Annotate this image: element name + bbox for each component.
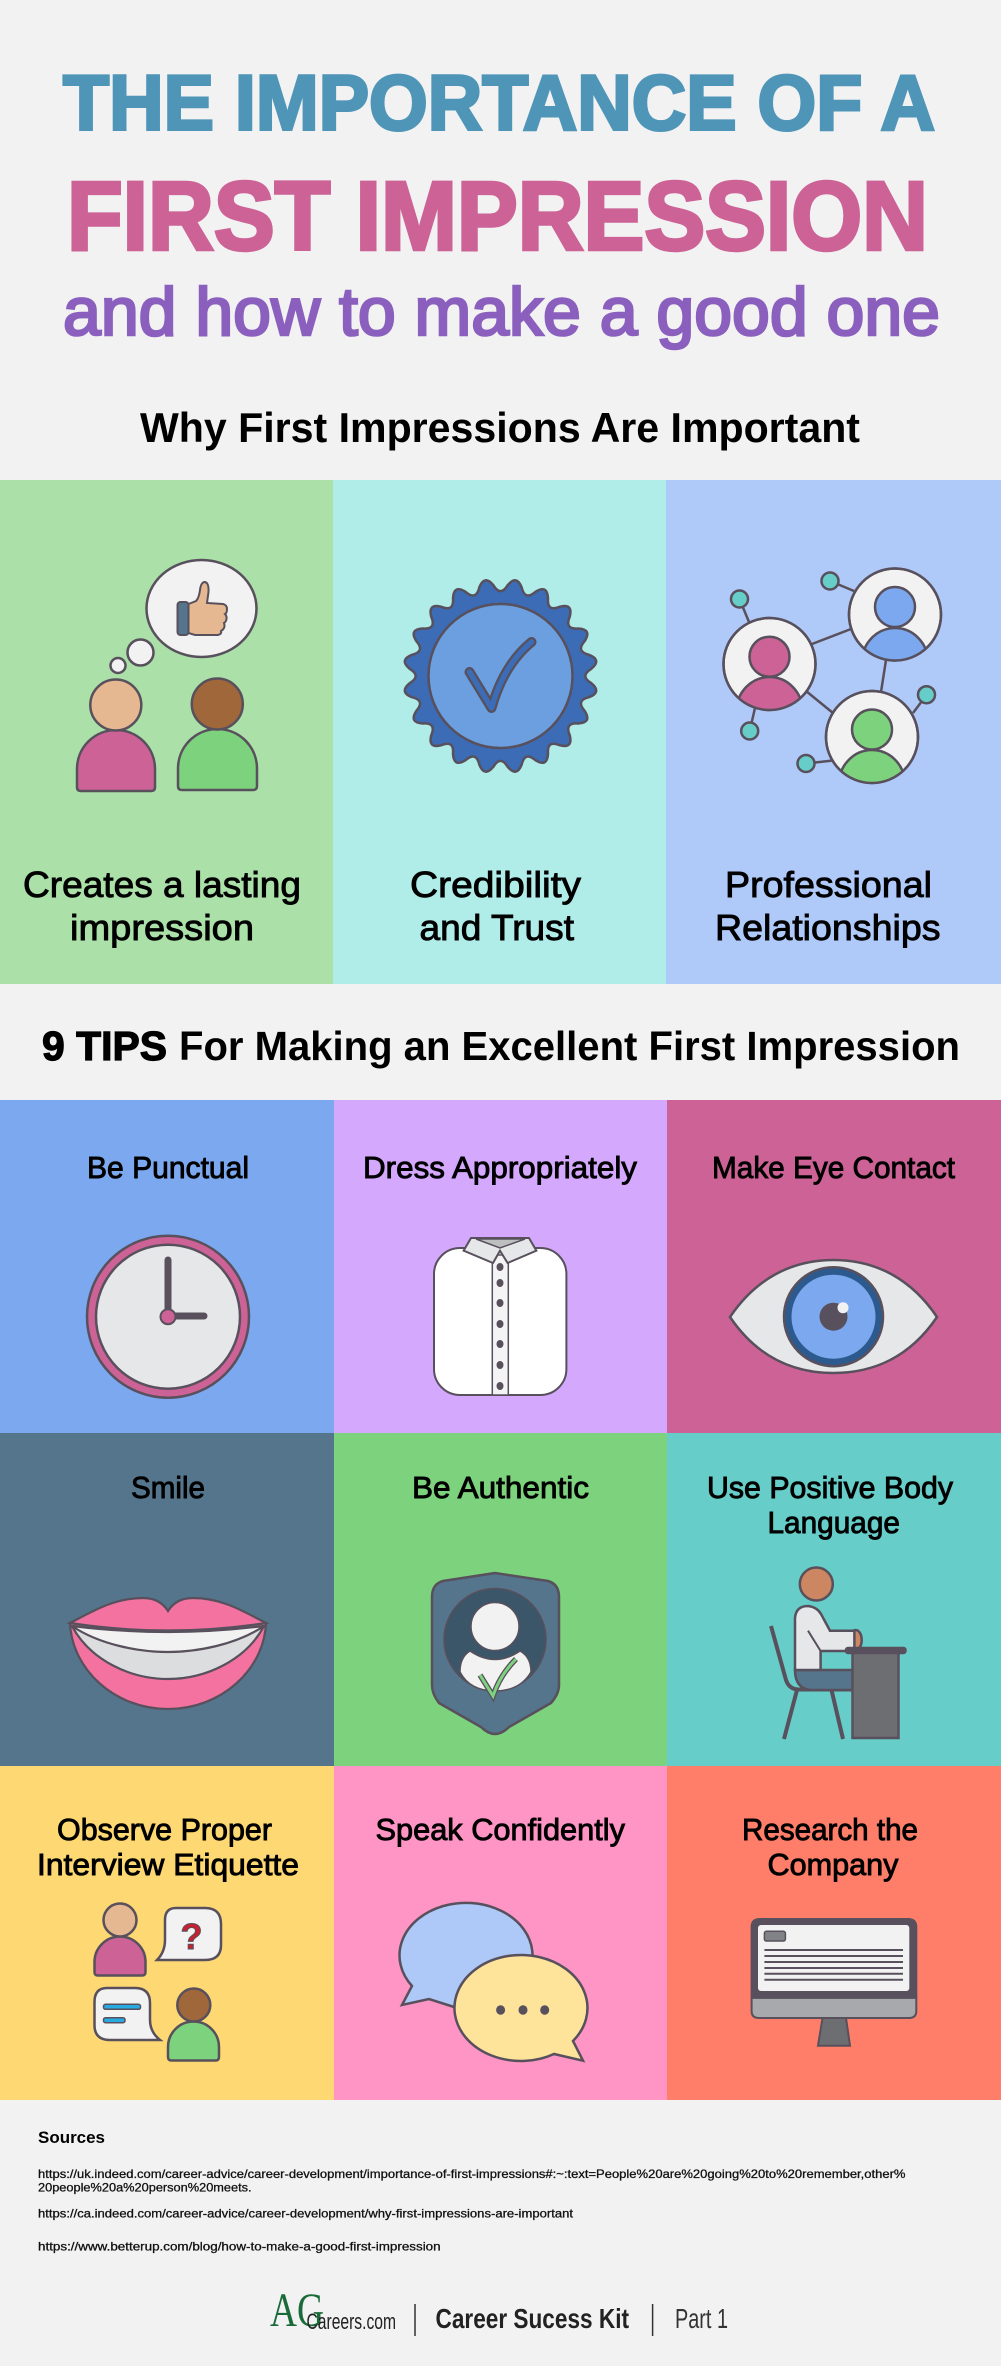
tip: dress appropriately — [334, 1100, 667, 1433]
panel: creates a lasting impression — [0, 480, 333, 984]
label: Speak Confidently — [376, 1812, 625, 1847]
tip: be authentic — [334, 1433, 667, 1766]
heading: why first impressions are important: Why First Impressions Are Important — [140, 404, 860, 451]
icon: eye — [730, 1260, 937, 1373]
title block — [63, 58, 940, 350]
label: Smile — [131, 1470, 205, 1505]
footer branding — [270, 2284, 728, 2337]
source links: https://uk.indeed.com/career-advice/career-development/importance-of-first-impressions#:~:text=People%20are%20going%20to%20remember,other% — [38, 2167, 906, 2181]
title line 2: FIRST IMPRESSION — [67, 162, 928, 270]
source links: https://ca.indeed.com/career-advice/career-development/why-first-impressions-are-important — [38, 2207, 574, 2221]
logo: AG Careers: AG — [270, 2284, 324, 2337]
icon: interview conversation: ? — [180, 1916, 202, 1957]
label: Use Positive Body — [707, 1470, 953, 1505]
icon: shirt — [434, 1238, 566, 1395]
icon: identity shield — [432, 1573, 559, 1734]
sources — [38, 2128, 906, 2254]
label — [23, 864, 301, 948]
label: Language — [768, 1505, 900, 1540]
icon: interview conversation — [94, 1904, 221, 2060]
panel: professional relationships — [666, 480, 1001, 984]
source links: https://www.betterup.com/blog/how-to-make-a-good-first-impression — [38, 2240, 441, 2254]
title line 3: and how to make a good one — [63, 274, 940, 350]
tip: speak confidently — [334, 1766, 667, 2100]
label: Company — [768, 1847, 899, 1882]
icon: person seated at desk — [771, 1568, 906, 1739]
label: Be Authentic — [412, 1470, 589, 1505]
heading: 9 tips: For Making an Excellent First Impression — [179, 1023, 960, 1069]
label: and Trust — [420, 907, 574, 948]
sources heading: Sources — [38, 2128, 105, 2147]
icon: clock — [87, 1236, 249, 1398]
label: Credibility — [410, 864, 581, 905]
heading: 9 tips: 9 TIPS — [42, 1023, 167, 1069]
label: Creates a lasting — [23, 864, 301, 905]
icon: verified badge — [405, 580, 596, 772]
label — [707, 1470, 953, 1540]
label — [715, 864, 940, 948]
source links — [38, 2167, 906, 2254]
kit name: Career Sucess Kit — [436, 2303, 629, 2334]
tip: observe proper interview etiquette — [0, 1766, 334, 2100]
label: Be Punctual — [87, 1150, 249, 1185]
icon: two people with thought bubble — [77, 560, 257, 791]
label: Make Eye Contact — [712, 1150, 955, 1185]
logo: AG Careers: Careers.com — [306, 2309, 396, 2334]
logo: AG Careers — [270, 2284, 396, 2337]
label: Professional — [725, 864, 932, 905]
label: Interview Etiquette — [37, 1847, 299, 1882]
label — [410, 864, 581, 948]
icon: speech bubbles — [400, 1903, 587, 2061]
label — [742, 1812, 918, 1882]
icon: smiling mouth — [70, 1598, 266, 1709]
label — [37, 1812, 299, 1882]
icon: people network — [722, 567, 942, 784]
label: Research the — [742, 1812, 918, 1847]
label: Relationships — [715, 907, 940, 948]
tip: smile — [0, 1433, 334, 1766]
tip: research the company — [667, 1766, 1001, 2100]
title line 1: THE IMPORTANCE OF A — [63, 58, 935, 146]
label: Observe Proper — [57, 1812, 272, 1847]
tip: make eye contact — [667, 1100, 1001, 1433]
source links: 20people%20a%20person%20meets. — [38, 2181, 252, 2195]
part number: Part 1 — [675, 2303, 728, 2334]
icon: computer monitor — [752, 1919, 916, 2046]
tip: be punctual — [0, 1100, 334, 1433]
tip: use positive body language — [667, 1433, 1001, 1766]
label: impression — [70, 907, 254, 948]
label: Dress Appropriately — [363, 1150, 637, 1185]
panel: credibility and trust — [333, 480, 666, 984]
